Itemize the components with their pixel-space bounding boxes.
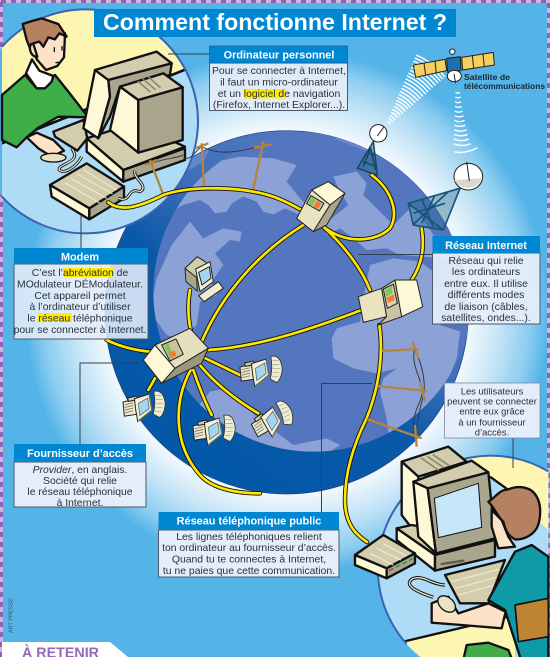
- tower 1: [357, 125, 387, 175]
- modem: [355, 535, 415, 578]
- scene circle: [0, 8, 199, 234]
- globe halo: [25, 50, 549, 574]
- computer: [397, 447, 495, 571]
- panel: fournisseur d'accès: à Internet.: [57, 498, 103, 509]
- heading: à retenir: [2, 642, 128, 657]
- poles, right: [367, 342, 427, 447]
- computer: [53, 52, 185, 182]
- panel: utilisateurs: à un fournisseur: [458, 416, 526, 428]
- credit: ART PRESSE: [8, 598, 14, 633]
- modem: [50, 163, 143, 219]
- network computers: [123, 356, 298, 445]
- panel: fournisseur d'accès: le réseau téléphonique: [27, 487, 133, 498]
- computer: top: [185, 257, 223, 302]
- panel: réseau internet: entre eux. Il utilise: [444, 279, 528, 290]
- poles, top: [145, 142, 272, 195]
- panel: réseau internet: les ordinateurs: [452, 267, 520, 278]
- hub: access provider: [143, 328, 208, 383]
- panel: fournisseur d'accès: [14, 444, 146, 509]
- panel: réseau téléphonique public: Les lignes téléphoniques relient: [176, 532, 322, 543]
- panel: modem: [14, 248, 148, 339]
- panel: fournisseur d'accès: Fournisseur d’accès: [27, 448, 133, 460]
- panel: utilisateurs: [444, 383, 540, 438]
- panel: réseau téléphonique public: Quand tu te connectes à Internet,: [172, 554, 326, 566]
- panel: modem: à l’ordinateur d’utiliser: [29, 302, 131, 313]
- panel: réseau téléphonique public: tu ne paies que cette communication.: [163, 566, 335, 577]
- panel: réseau internet: Réseau Internet: [445, 240, 527, 252]
- globe: [105, 131, 473, 494]
- panel: utilisateurs: Les utilisateurs: [461, 386, 524, 396]
- panel: réseau internet: Réseau qui relie: [448, 256, 524, 267]
- tower 2: [408, 162, 483, 230]
- panel: modem: MOdulateur DÉModulateur.: [17, 278, 143, 290]
- panel: réseau internet: de liaison (câbles,: [444, 302, 528, 313]
- connector lines: [80, 54, 513, 512]
- server: middle of the globe: [297, 182, 345, 232]
- panel: ordinateur personnel: [210, 46, 348, 111]
- panel: réseau téléphonique public: ton ordinateur au fournisseur d’accès.: [162, 543, 336, 554]
- cables: [107, 175, 423, 542]
- panel: utilisateurs: d’accès.: [475, 426, 509, 438]
- right computer scene: [355, 447, 548, 657]
- satellite label: Satellite de: [464, 72, 510, 82]
- title: Comment fonctionne Internet ?: [103, 9, 447, 35]
- panel: réseau téléphonique public: Réseau téléphonique public: [177, 516, 321, 528]
- panel: réseau internet: différents modes: [448, 290, 524, 301]
- person: [2, 18, 88, 157]
- panel: ordinateur personnel: il faut un micro-ordinateur: [220, 78, 338, 88]
- panel: ordinateur personnel: et un logiciel de navigation: [218, 89, 340, 100]
- panel: utilisateurs: peuvent se connecter: [447, 396, 537, 406]
- mouse and cord: [41, 148, 82, 171]
- satellite: [413, 49, 494, 83]
- panel: réseau internet: [432, 236, 540, 324]
- panel: réseau téléphonique public: [158, 512, 339, 577]
- left computer scene: [0, 8, 199, 234]
- panel: modem: Modem: [61, 252, 99, 264]
- computer: right: [240, 356, 282, 386]
- computer: lower left: [123, 391, 165, 421]
- panel: modem: C’est l’abréviation de: [32, 268, 128, 279]
- scene circle: [375, 450, 548, 657]
- panel: modem: Cet appareil permet: [34, 291, 126, 302]
- panel: fournisseur d'accès: Provider, en anglais.: [33, 465, 127, 476]
- panel: modem: pour se connecter à Internet.: [14, 325, 146, 336]
- computer: lower right: [247, 398, 298, 442]
- panel: fournisseur d'accès: Société qui relie: [43, 476, 117, 487]
- panel: ordinateur personnel: Ordinateur personnel: [224, 50, 334, 62]
- satellite signal waves: [388, 55, 477, 152]
- keyboard and mouse: [409, 560, 505, 603]
- panel: ordinateur personnel: (Firefox, Internet Explorer...).: [213, 100, 345, 111]
- telephone poles and network cables: [107, 142, 427, 542]
- panel: utilisateurs: entre eux grâce: [459, 406, 525, 416]
- hub: internet network: [358, 280, 423, 325]
- continents: [150, 157, 460, 478]
- person: [432, 487, 548, 657]
- satellite label: télécommunications: [464, 81, 545, 91]
- satellite label: [464, 72, 545, 91]
- panel: réseau internet: satellites, ondes...).: [441, 313, 531, 324]
- panel: modem: le réseau téléphonique: [27, 314, 133, 324]
- computer: bottom: [193, 415, 235, 445]
- panel: ordinateur personnel: Pour se connecter à Internet,: [212, 66, 346, 77]
